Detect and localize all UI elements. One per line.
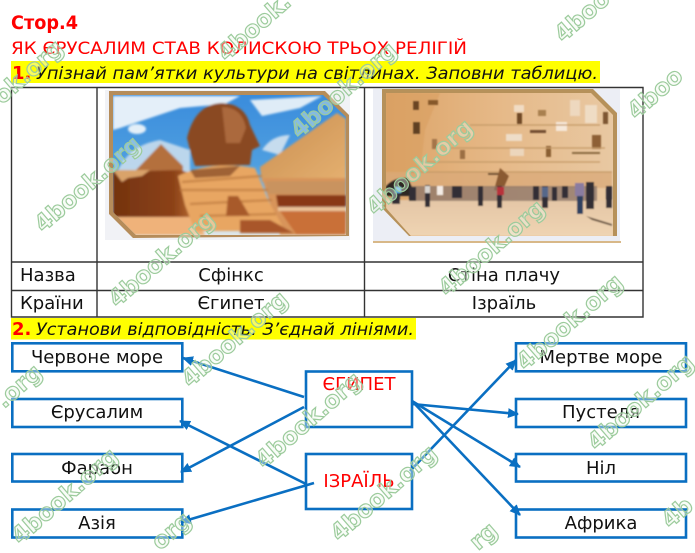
cell: Israel: Ізраїль	[472, 293, 536, 314]
row label: countries: Країни	[20, 293, 84, 314]
centre box: Israel: ІЗРАЇЛЬ	[323, 471, 395, 492]
task 2 instruction: 2.	[12, 319, 31, 340]
arrow: Egypt to Pharaoh	[181, 407, 304, 472]
watermarks: 4book.org	[434, 195, 550, 302]
watermarks: 4book.org	[251, 367, 367, 474]
centre box: Egypt: ЄГИПЕТ	[323, 374, 396, 395]
watermarks: 4book.org	[326, 440, 442, 547]
cell: Egypt: Єгипет	[197, 293, 265, 314]
box: Dead Sea: Мертве море	[539, 347, 663, 368]
row label: name: Назва	[20, 265, 76, 286]
watermarks: 4book.org	[177, 286, 293, 393]
box: Africa: Африка	[565, 513, 637, 534]
left column boxes	[12, 343, 182, 538]
arrow: Israel to Asia	[181, 483, 314, 522]
cell: wailing wall: Стіна плачу	[448, 265, 560, 286]
watermarks: 4boo	[623, 63, 688, 125]
box: Red Sea	[12, 343, 182, 371]
box: Pharaoh: Фараон	[61, 458, 133, 479]
box: Desert	[516, 399, 686, 427]
watermarks: 4book.org	[30, 131, 146, 238]
arrow: Egypt to Nile	[412, 401, 520, 467]
arrow: Israel to Jerusalem	[180, 421, 306, 484]
box: Jerusalem: Єрусалим	[51, 402, 143, 423]
arrow: Egypt to Desert	[412, 404, 518, 414]
watermarks: 4book.org	[7, 443, 123, 550]
cell: sphinx: Сфінкс	[198, 265, 264, 286]
box: Africa	[516, 510, 686, 538]
task 2 instruction: Установи відповідність. З’єднай лініями.	[36, 320, 414, 340]
centre box: Israel	[306, 454, 412, 509]
watermarks: 4book.org	[362, 114, 478, 221]
centre box: Egypt	[306, 372, 412, 427]
box: Asia: Азія	[78, 513, 116, 534]
connecting arrows	[180, 358, 520, 522]
box: Jerusalem	[12, 399, 182, 427]
box: Dead Sea	[516, 343, 686, 371]
watermarks: 4book.org	[512, 269, 628, 376]
task 1 instruction: Упізнай пам’ятки культури на світлинах. Заповни таблицю.	[36, 64, 598, 84]
box: Nile	[516, 454, 686, 482]
photo: Sphinx and pyramids	[105, 90, 350, 240]
photo: Wailing Wall	[373, 89, 621, 243]
box: Red Sea: Червоне море	[31, 347, 163, 368]
arrow: Israel to Dead Sea	[410, 360, 516, 471]
watermarks: 4book.org	[286, 37, 402, 144]
page heading: Стор.4	[11, 13, 78, 34]
arrow: Egypt to Red Sea	[183, 358, 304, 397]
box: Nile: Ніл	[586, 458, 616, 479]
arrow: Egypt to Africa	[412, 401, 520, 515]
lesson title: ЯК ЄРУСАЛИМ СТАВ КОЛИСКОЮ ТРЬОХ РЕЛІГІЙ	[11, 39, 467, 58]
box: Desert: Пустеля	[562, 402, 640, 423]
right column boxes	[516, 343, 686, 538]
box: Pharaoh	[12, 454, 182, 482]
table: landmarks	[12, 88, 643, 317]
watermarks: 4book.org	[104, 206, 220, 313]
box: Asia	[12, 510, 182, 538]
task 1 instruction: 1.	[12, 63, 31, 84]
